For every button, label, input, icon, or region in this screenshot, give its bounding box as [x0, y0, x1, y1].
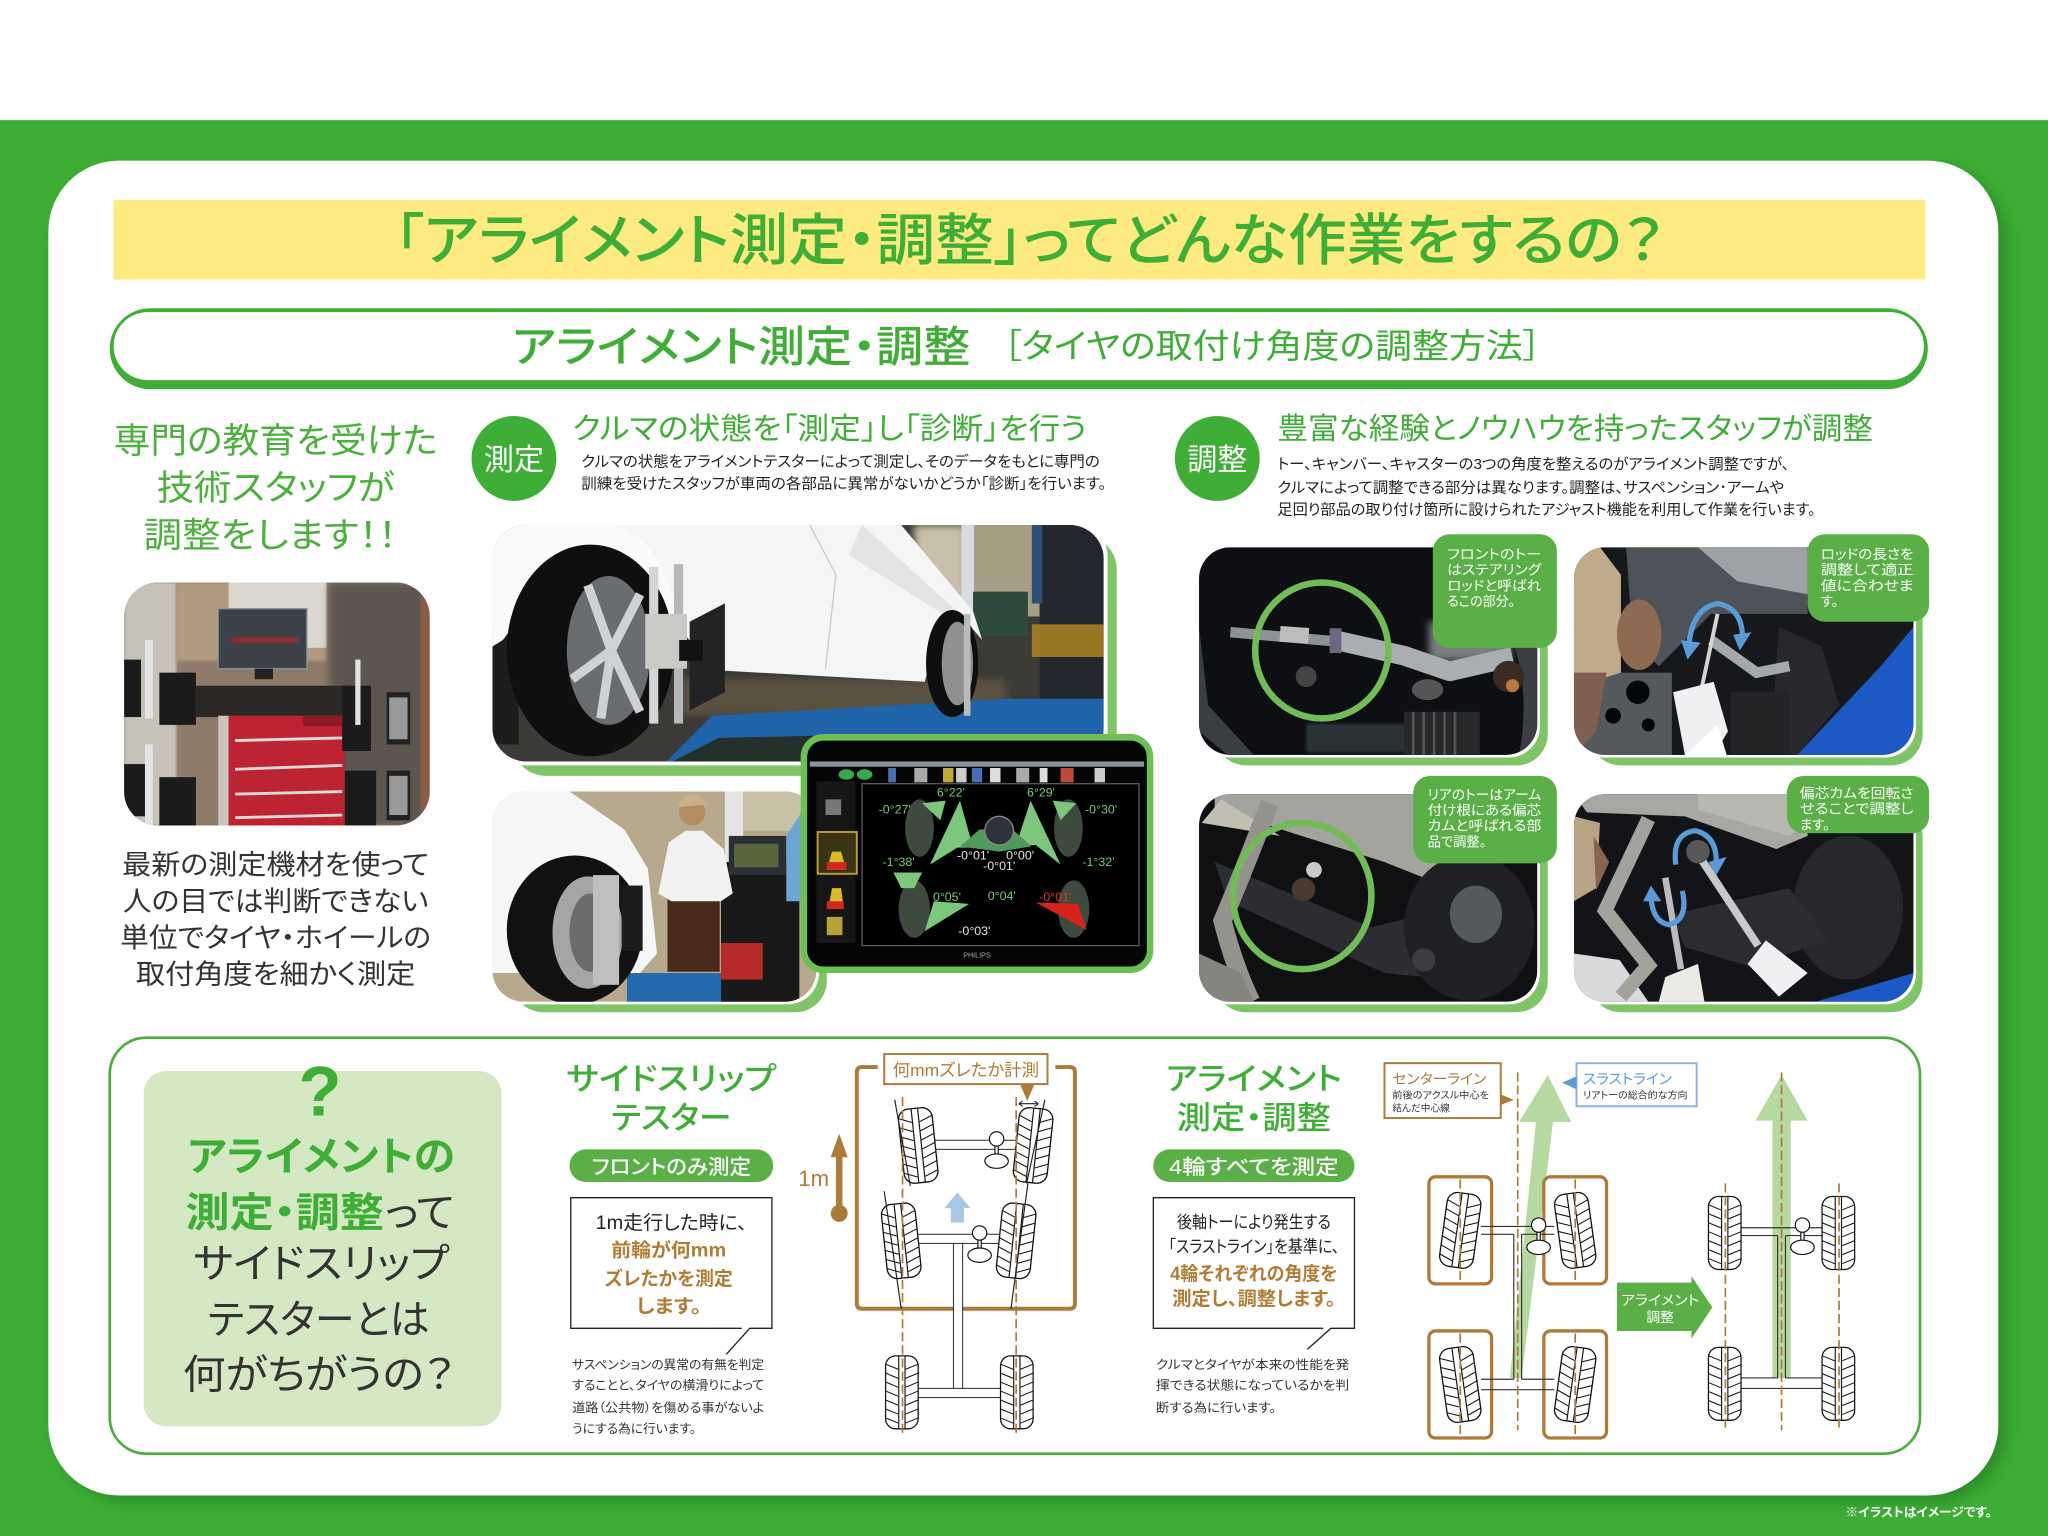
screen readings panel: -0°27'	[879, 803, 911, 817]
question box: テスターとは	[208, 1297, 430, 1343]
caption: せることで調整し	[1800, 802, 1914, 817]
alignment speech box: 4輪それぞれの角度を	[1170, 1263, 1337, 1285]
offset marker	[1019, 1101, 1038, 1106]
side slip note: うにする為に行います。	[572, 1422, 696, 1436]
chassis	[1708, 1196, 1855, 1420]
left description text: 取付角度を細かく測定	[136, 959, 415, 990]
photo: front toe steering rod	[1199, 534, 1557, 765]
caption: ロッドの長さを	[1821, 547, 1913, 562]
monitor screen with measurements	[804, 737, 1150, 970]
adjustment heading: 豊富な経験とノウハウを持ったスタッフが調整	[1277, 413, 1873, 446]
screen readings panel: -0°03'	[958, 924, 990, 938]
thrust line label	[1562, 1063, 1697, 1106]
section heading pill	[110, 308, 1928, 389]
photo: alignment equipment	[124, 583, 430, 825]
screen readings panel: 6°22'	[937, 786, 965, 800]
left heading text	[114, 422, 438, 555]
bottom comparison panel	[110, 1038, 1920, 1454]
chassis	[1438, 1191, 1597, 1424]
caption: 偏芯カムを回転さ	[1800, 786, 1913, 801]
alignment speech box	[1153, 1198, 1354, 1349]
caption	[1808, 534, 1929, 622]
center line label	[1384, 1063, 1514, 1118]
caption: 値に合わせま	[1821, 578, 1913, 593]
left heading text: 専門の教育を受けた	[114, 422, 438, 461]
screen readings panel: -0°01'	[983, 859, 1015, 873]
left heading text: 技術スタッフが	[157, 469, 395, 508]
adjustment description: 足回り部品の取り付け箇所に設けられたアジャスト機能を利用して作業を行います。	[1277, 502, 1816, 519]
side slip speech box	[571, 1198, 772, 1354]
measurement description: クルマの状態をアライメントテスターによって測定し、そのデータをもとに専門の	[581, 452, 1100, 470]
corrected thrust arrow	[1755, 1075, 1808, 1378]
measure label	[884, 1054, 1048, 1101]
screen toolbar	[810, 761, 1144, 782]
left description text: 人の目では判断できない	[123, 885, 428, 916]
adjustment arrow: アライメント	[1621, 1293, 1699, 1308]
adjustment description: トー、キャンバー、キャスターの3つの角度を整えるのがアライメント調整ですが、	[1277, 456, 1789, 473]
question box: 測定・調整	[185, 1189, 384, 1235]
screen readings panel: -0°30'	[1085, 803, 1117, 817]
footnote: ※イラストはイメージです。	[1846, 1505, 1992, 1519]
caption	[1413, 776, 1557, 863]
alignment speech box: 後軸トーにより発生する	[1177, 1213, 1331, 1232]
screen readings panel: -0°01'	[957, 848, 989, 862]
thrust line label: リアトーの総合的な方向	[1583, 1088, 1688, 1101]
measure label: 何mmズレたか計測	[893, 1061, 1039, 1080]
side slip heading: テスター	[611, 1100, 731, 1135]
highlight circle	[1255, 583, 1388, 718]
side slip note	[572, 1357, 764, 1436]
measurement description	[581, 452, 1106, 492]
adjustment arrow: 調整	[1646, 1310, 1674, 1325]
caption: ロッドと呼ばれ	[1447, 578, 1542, 593]
side slip speech box: 1m走行した時に、	[596, 1212, 747, 1234]
caption: はステアリング	[1447, 563, 1542, 578]
one meter arrow	[798, 1134, 848, 1222]
screen readings panel: 0°00'	[1006, 848, 1034, 862]
adjustment description	[1277, 456, 1816, 519]
side slip tag	[569, 1149, 773, 1182]
title banner	[114, 200, 1925, 280]
side slip speech box: します。	[636, 1296, 701, 1318]
side slip heading: サイドスリップ	[566, 1061, 777, 1096]
screen readings panel: 0°05'	[933, 890, 961, 904]
caption	[1787, 776, 1929, 833]
measurement description: 訓練を受けたスタッフが車両の各部品に異常がないかどうか「診断」を行います。	[581, 475, 1106, 492]
screen readings panel: 6°29'	[1027, 786, 1055, 800]
caption: ます。	[1800, 817, 1830, 832]
badge: adjustment: 調整	[1187, 444, 1247, 477]
alignment tag: 4輪すべてを測定	[1169, 1156, 1339, 1179]
one meter arrow: 1m	[798, 1166, 829, 1191]
photo: technician at wheel	[492, 789, 827, 1012]
side slip note: サスペンションの異常の有無を判定	[572, 1357, 764, 1372]
caption: 調整して適正	[1821, 563, 1913, 578]
badge: measurement: 測定	[484, 444, 544, 477]
caption: 品で調整。	[1428, 834, 1486, 849]
photo: adjusting rod length	[1574, 534, 1929, 765]
screen readings panel	[862, 784, 1139, 946]
screen readings panel: -0°01'	[1039, 890, 1071, 904]
adjustment arrow	[1617, 1276, 1712, 1339]
caption: リアのトーはアーム	[1428, 787, 1541, 802]
screen readings panel: -1°32'	[1082, 855, 1115, 869]
alignment note: 断する為に行います。	[1156, 1401, 1276, 1415]
question box: サイドスリップ	[193, 1240, 450, 1286]
center line label: センターライン	[1392, 1071, 1487, 1088]
thrust line label: スラストライン	[1583, 1072, 1672, 1088]
center line label: 結んだ中心線	[1392, 1102, 1450, 1115]
side slip speech box: ズレたかを測定	[605, 1267, 733, 1290]
tester frame	[857, 1067, 1075, 1309]
alignment heading	[1166, 1061, 1342, 1135]
alignment speech box: 測定し、調整します。	[1172, 1288, 1336, 1310]
side slip diagram	[798, 1054, 1075, 1437]
question box: 何がちがうの？	[183, 1351, 455, 1397]
wheel frames	[1429, 1177, 1607, 1438]
thrust line arrow	[1510, 1075, 1571, 1378]
left description text: 最新の測定機材を使って	[122, 849, 429, 880]
caption: フロントのトー	[1447, 547, 1541, 562]
side slip heading	[566, 1061, 777, 1135]
caption: カムと呼ばれる部	[1428, 819, 1541, 834]
badge: measurement	[472, 416, 556, 501]
travel direction arrow	[944, 1192, 970, 1223]
center line label: 前後のアクスル中心を	[1392, 1088, 1489, 1101]
side slip speech box: 前輪が何mm	[611, 1238, 726, 1261]
adjustment description: クルマによって調整できる部分は異なります。調整は、サスペンション･アームや	[1277, 479, 1784, 496]
photo: eccentric cam adjustment	[1574, 776, 1929, 1012]
side slip note: することと、タイヤの横滑りによって	[572, 1378, 764, 1393]
question box: アライメントの	[187, 1133, 455, 1179]
car chassis	[880, 1107, 1054, 1429]
highlight circle	[1233, 823, 1371, 969]
diagram: before adjustment	[1429, 1072, 1607, 1438]
section heading pill: アライメント測定・調整	[512, 324, 970, 372]
caption: るこの部分。	[1447, 594, 1515, 609]
badge: adjustment	[1175, 416, 1260, 501]
photo: car on lift with sensor	[492, 522, 1117, 776]
alignment heading: 測定・調整	[1177, 1100, 1331, 1135]
side slip note: 道路（公共物）を傷める事がないよ	[572, 1400, 764, 1415]
left heading text: 調整をします！！	[144, 516, 397, 555]
title banner: 「アライメント測定・調整」ってどんな作業をするの？	[394, 209, 1664, 272]
screen side tabs	[816, 781, 857, 943]
alignment tag	[1153, 1149, 1354, 1182]
question box: って	[385, 1189, 455, 1235]
left description text: 単位でタイヤ・ホイールの	[120, 922, 431, 953]
screen readings panel: 0°04'	[988, 889, 1016, 903]
alignment speech box: 「スラストライン」を基準に、	[1168, 1238, 1339, 1257]
caption: す。	[1821, 594, 1838, 609]
dashed reference lines	[903, 1097, 1016, 1437]
alignment heading: アライメント	[1166, 1061, 1342, 1096]
question box: ?	[298, 1051, 342, 1130]
diagram: after adjustment	[1708, 1072, 1855, 1430]
question box	[144, 1051, 502, 1426]
side slip tag: フロントのみ測定	[592, 1156, 751, 1179]
caption	[1433, 534, 1557, 648]
screen readings panel: -1°38'	[883, 855, 915, 869]
caption: 付け根にある偏芯	[1428, 803, 1542, 818]
photo: rear toe arm	[1199, 776, 1557, 1012]
left description text	[120, 849, 431, 990]
alignment note	[1156, 1357, 1350, 1415]
section heading pill: ［タイヤの取付け角度の調整方法］	[1003, 328, 1541, 366]
alignment note: 揮できる状態になっているかを判	[1156, 1378, 1349, 1393]
monitor screen with measurements: PHILIPS	[963, 951, 991, 959]
rotation arrows	[1689, 603, 1742, 647]
measurement heading: クルマの状態を「測定」し「診断」を行う	[572, 413, 1087, 446]
alignment note: クルマとタイヤが本来の性能を発	[1156, 1357, 1350, 1372]
